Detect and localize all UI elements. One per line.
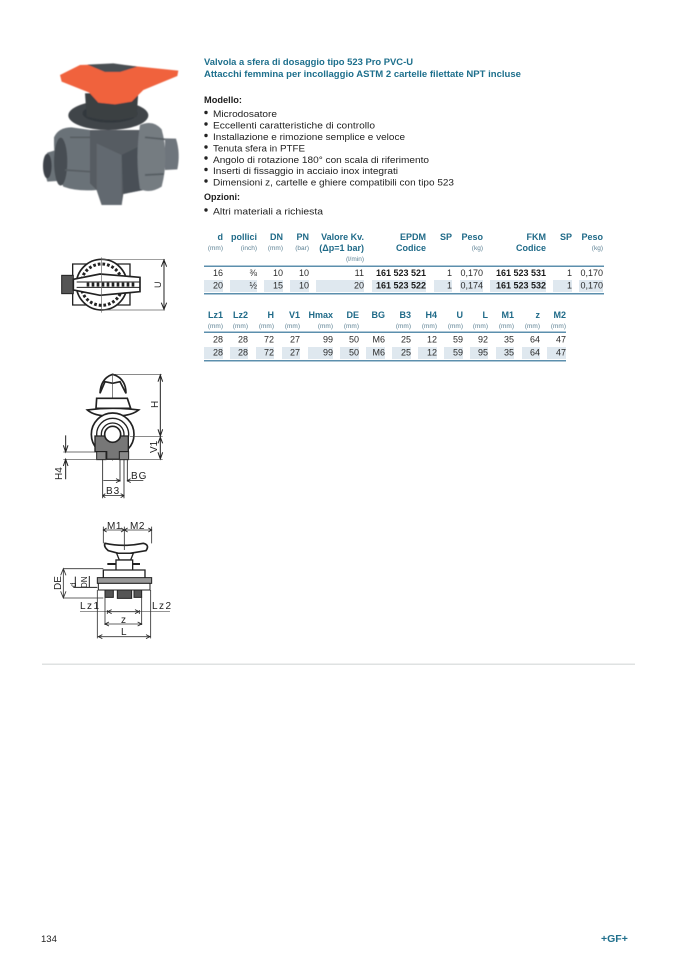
product image: valve [43,63,179,205]
table: dimensions: 27 [290,334,300,344]
table: dimensions: 50 [349,334,359,344]
table: dimensions: (mm) [448,323,463,330]
logo: GF: +GF+ [601,933,628,945]
labels: front view dimensions: M2 [130,521,145,532]
table: codes [204,232,604,294]
table: dimensions: BG [372,310,385,320]
table: dimensions: 95 [478,348,488,358]
table: dimensions: 25 [401,348,411,358]
table: dimensions: H4 [425,310,437,320]
table: codes: d [218,232,223,242]
table: codes: Peso [581,232,603,242]
table: codes: 10 [299,268,309,278]
table: dimensions: (mm) [259,323,274,330]
table: dimensions: 99 [323,334,333,344]
table: codes: (l/min) [346,256,364,263]
table: dimensions: M6 [372,334,385,344]
table: dimensions: 64 [530,348,540,358]
technical drawing: top view [62,257,167,313]
labels: side view dimensions: V1 [149,440,160,453]
text block: modello: Microdosatore [213,109,277,119]
table: codes: 0,170 [580,268,603,278]
table: dimensions: 25 [401,334,411,344]
labels: front view dimensions: L [121,627,127,638]
table: codes: (mm) [208,245,223,252]
table: dimensions: B3 [399,310,411,320]
table: dimensions: (mm) [499,323,514,330]
table: codes: 161 523 532 [496,280,546,290]
table: dimensions: (mm) [318,323,333,330]
table: codes: 20 [354,280,364,290]
title [204,57,521,79]
table: dimensions: (mm) [208,323,223,330]
table: dimensions: DE [346,310,359,320]
table: codes: 10 [299,280,309,290]
table: codes: 11 [355,268,364,278]
labels: side view dimensions [54,401,161,497]
table: dimensions: 12 [427,334,437,344]
table: dimensions: (mm) [525,323,540,330]
table: codes: Codice [516,243,546,253]
table: codes: 161 523 522 [376,280,426,290]
table: dimensions: V1 [289,310,300,320]
title: Attacchi femmina per incollaggio ASTM 2 cartelle filettate NPT incluse [204,69,521,79]
table: dimensions: H [268,310,274,320]
table: dimensions: Hmax [308,310,333,320]
table: dimensions: 72 [264,348,274,358]
table: codes: 16 [213,268,223,278]
table: codes: 1 [567,268,572,278]
labels: side view dimensions: BG [131,471,147,482]
divider [42,664,635,665]
table: codes: (mm) [268,245,283,252]
table: dimensions: 28 [238,334,248,344]
labels: front view dimensions [53,521,173,638]
technical drawing: side view [63,374,163,498]
table: dimensions: 64 [530,334,540,344]
label: U: U [153,282,163,288]
table: dimensions: M2 [553,310,566,320]
table: codes: (inch) [241,245,257,252]
table: dimensions: 47 [556,334,566,344]
table: codes: 1 [567,280,572,290]
text block: modello: Tenuta sfera in PTFE [213,144,305,154]
table: dimensions: (mm) [396,323,411,330]
table: codes: SP [440,232,452,242]
table: dimensions: 50 [349,348,359,358]
text block: modello: Eccellenti caratteristiche di controllo [213,120,375,130]
text block: opzioni: Altri materiali a richiesta [213,206,323,216]
table: dimensions [204,310,566,362]
labels: front view dimensions: z [121,615,126,626]
table: codes: (bar) [295,245,309,252]
table: dimensions: (mm) [422,323,437,330]
table: codes: ⅜ [249,268,257,278]
table: dimensions: (mm) [473,323,488,330]
table: dimensions: 72 [264,334,274,344]
table: codes: PN [296,232,309,242]
table: dimensions: (mm) [233,323,248,330]
table: codes: SP [560,232,572,242]
table: codes: Codice [396,243,426,253]
text block: modello: Installazione e rimozione semplice e veloce [213,132,405,142]
labels: front view dimensions: d [69,583,78,587]
text block: opzioni [204,192,323,216]
table: dimensions: Lz2 [233,310,248,320]
table: dimensions: L [482,310,488,320]
table: dimensions: (mm) [551,323,566,330]
labels: side view dimensions: H [150,401,161,408]
table: dimensions: 99 [323,348,333,358]
table: dimensions: M1 [501,310,514,320]
table: codes: pollici [231,232,257,242]
text block: modello: Dimensioni z, cartelle e ghiere compatibili con tipo 523 [213,178,454,188]
table: dimensions: 28 [238,348,248,358]
table: codes: 161 523 521 [376,268,426,278]
table: codes: 0,174 [460,280,483,290]
labels: front view dimensions: Lz1 [80,601,101,612]
table: codes: ½ [249,280,257,290]
labels: front view dimensions: DE [53,576,64,590]
table: codes: FKM [526,232,546,242]
table: dimensions: 92 [478,334,488,344]
table: dimensions: 28 [213,348,223,358]
labels: front view dimensions: DN [80,576,89,588]
text block: modello [204,95,454,188]
table: codes: 0,170 [460,268,483,278]
table: codes: 10 [273,268,283,278]
table: codes: Peso [461,232,483,242]
text block: modello: Inserti di fissaggio in acciaio inox integrati [213,166,398,176]
table: codes: (Δp=1 bar) [319,243,364,253]
table: codes: EPDM [400,232,426,242]
table: codes: (kg) [472,245,483,252]
table: dimensions: 27 [290,348,300,358]
table: dimensions: z [536,310,540,320]
table: codes: Valore Kv. [321,232,364,242]
table: dimensions: 59 [453,334,463,344]
table: codes: 1 [447,268,452,278]
text block: modello: Angolo di rotazione 180° con scala di riferimento [213,155,429,165]
labels: side view dimensions: B3 [106,486,120,497]
table: dimensions: U [456,310,463,320]
table: dimensions: 47 [556,348,566,358]
table: dimensions: 35 [504,334,514,344]
table: dimensions: M6 [372,348,385,358]
table: dimensions: Lz1 [208,310,223,320]
table: codes: (kg) [592,245,603,252]
labels: front view dimensions: M1 [107,521,122,532]
table: dimensions: 35 [504,348,514,358]
table: dimensions: 12 [427,348,437,358]
table: codes: DN [270,232,283,242]
text block: modello: Modello: [204,95,242,105]
table: codes: 15 [273,280,283,290]
text block: opzioni: Opzioni: [204,192,240,202]
labels: side view dimensions: H4 [54,467,65,480]
table: dimensions: 59 [453,348,463,358]
page number: 134 [41,934,57,945]
table: codes: 0,170 [580,280,603,290]
table: codes: 1 [447,280,452,290]
table: dimensions: 28 [213,334,223,344]
table: dimensions: (mm) [344,323,359,330]
table: codes: 20 [213,280,223,290]
labels: front view dimensions: Lz2 [152,601,173,612]
title: Valvola a sfera di dosaggio tipo 523 Pro PVC-U [204,57,413,67]
table: codes: 161 523 531 [496,268,546,278]
technical drawing: front view [61,527,170,639]
table: dimensions: (mm) [285,323,300,330]
